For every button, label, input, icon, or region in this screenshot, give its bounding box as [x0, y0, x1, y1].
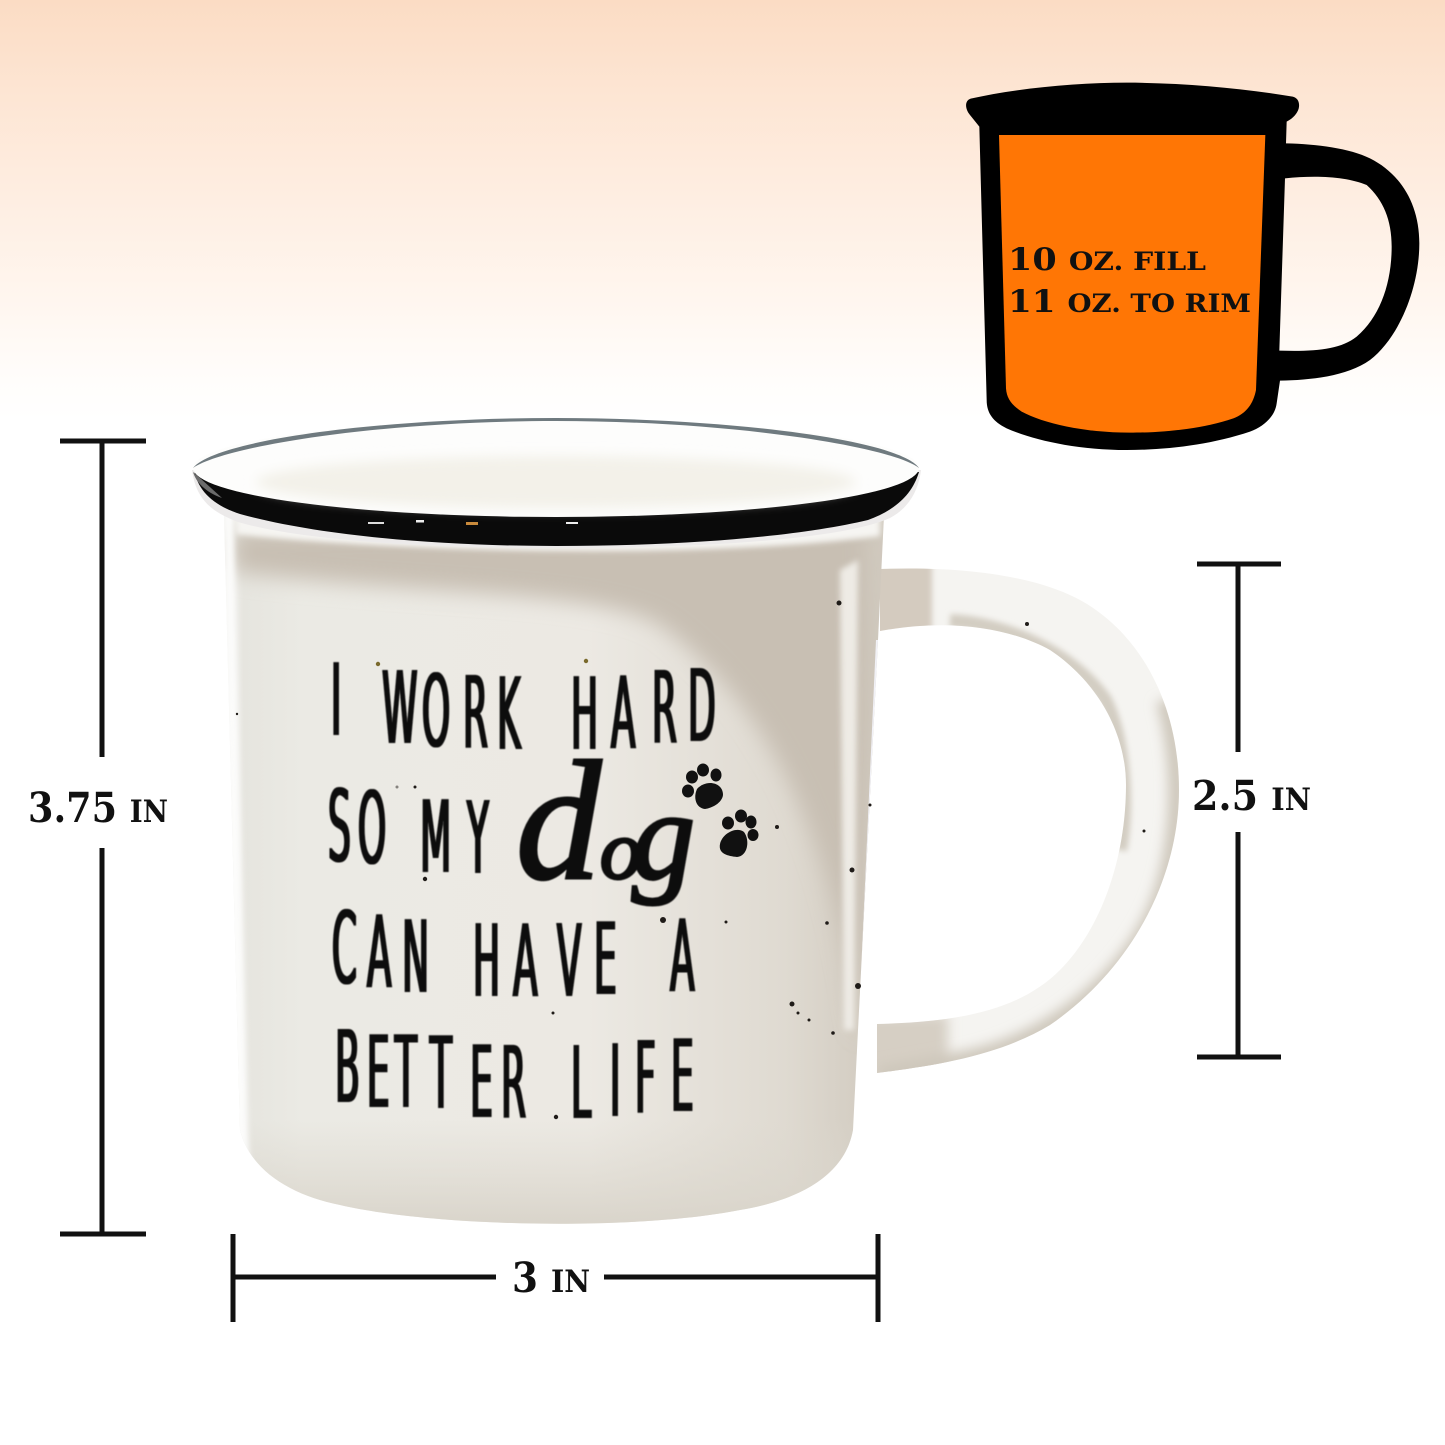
- top shadow: [232, 531, 868, 974]
- dimension: mug diameter 3 in: [233, 1234, 878, 1322]
- mug slogan: [328, 642, 716, 1142]
- photo: white speckled enamel mug: [192, 418, 1190, 1230]
- mug handle: [877, 568, 1179, 1073]
- orange fill: [999, 135, 1265, 433]
- mug rim: [192, 418, 921, 548]
- icon: upper paw: [682, 764, 723, 809]
- mug silhouette: [966, 83, 1419, 450]
- script word: dog: d: [516, 727, 602, 915]
- slogan line 2: SO MY: [328, 768, 489, 897]
- diameter label: 3 IN: [512, 1254, 590, 1302]
- slogan line 1: I WORK HARD: [331, 642, 716, 773]
- slogan line 3: CAN HAVE A: [332, 890, 695, 1020]
- dimension: mug height 3.75 in: [28, 441, 168, 1234]
- height label: 3.75 IN: [28, 784, 168, 832]
- script word: dog: o: [600, 804, 642, 897]
- icon: paw prints: [682, 764, 758, 857]
- handle label: 2.5 IN: [1192, 772, 1311, 820]
- mug speckles: [236, 600, 1146, 1119]
- slogan line 4: BETTER LIFE: [335, 1009, 694, 1142]
- rim capacity text: 11 OZ. TO RIM: [1008, 284, 1251, 320]
- mug body: [220, 510, 888, 1230]
- fill capacity text: 10 OZ. FILL: [1008, 242, 1206, 278]
- dimension: handle height 2.5 in: [1192, 564, 1311, 1057]
- icon: lower paw: [720, 810, 758, 857]
- script word: dog: g: [632, 767, 695, 906]
- capacity diagram: mug silhouette: [966, 83, 1419, 450]
